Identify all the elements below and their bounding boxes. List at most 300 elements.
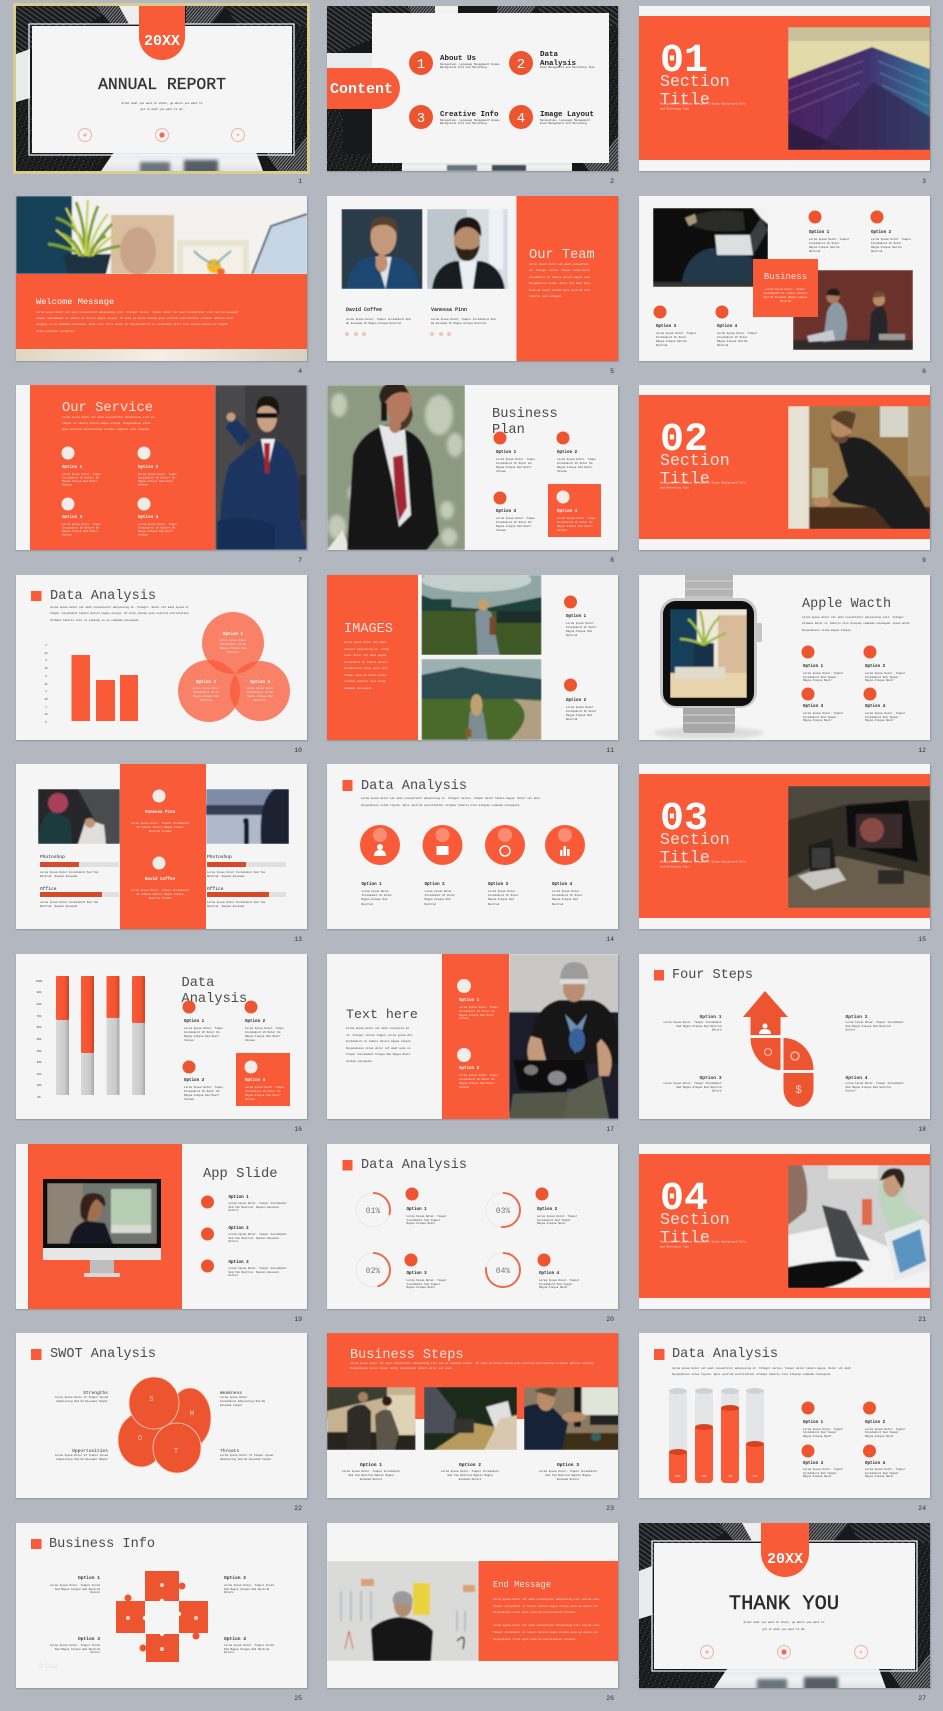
option 2 [424,882,456,906]
option 2: Sed Tem Nostrud Sapien Magna [447,1473,493,1477]
icon circles [360,825,585,865]
option 3: Option 3 [228,1260,249,1265]
section subtitle [660,102,746,110]
option 3: Lorem Ipsum Dolor. Tempo [184,1085,223,1089]
axis labels: 80% [37,1003,42,1006]
option 2: Veniam [245,1038,255,1042]
heading: Data [182,976,214,991]
skill bars left: Nostrud. Sapien Eiusmod [40,874,77,878]
cylinder chart: 78% [728,1475,733,1478]
venn diagram: Option 2 [196,680,217,685]
option 2 [870,210,912,253]
item 2: Data [540,51,559,59]
option 3: Option 3 [406,1271,427,1276]
option 1: Incididunt Ut Dolor Do [459,1009,495,1013]
skill bars right: Office [207,886,224,892]
bar chart: 4 [45,690,47,693]
item 2: Analysis [540,60,577,68]
section title [660,830,730,867]
option 4: Lorem Ipsum Dolor. Tempor [717,331,758,335]
orange callout: Incididunt Ut Labore Dolore [764,291,808,295]
orange callout: Lorem Ipsum Dolor. Tempor [765,287,806,291]
member: David Coffee [131,856,189,900]
donut 03%: 03% [496,1207,510,1216]
body text: tempor incididunt ut labore et dolore magna aliqua. Ut enim ad minim veniam quis nostrud exercitation ullamco laboris nisi [36,316,233,320]
member: Vanessa Pinn [430,307,496,336]
option 3: Dolore [712,1088,722,1092]
option 3: Veniam [184,1097,194,1101]
option 1: Magna Aliqua Nostr [803,678,832,682]
slide 6: business: 6 [922,368,926,375]
photo: laptop meeting [424,1387,517,1450]
orange panel [30,385,215,550]
weakness: Weakness [220,1390,242,1396]
skill bars right: Nostrud. Sapien Eiusmod [207,874,244,878]
body text: Tempor ut labore dolore magna aliqua. Suspendisse vitae [62,421,151,425]
slide 21: section 04 [639,1144,931,1323]
option 4: Option 4 [224,1636,246,1642]
opportunities [55,1448,108,1461]
skill bars right: Lorem Ipsum Dolor Incididunt Sed Tem [207,870,265,874]
option 2: Option 2 [865,664,886,669]
content tab [327,68,400,109]
faded blog mark: blog [39,1662,58,1671]
body text: Lorem ipsum dolor sit amet [344,640,386,644]
heading marker [31,1539,42,1549]
slide 24: data analysis cylinders [639,1333,931,1512]
option 1: Lorem Ipsum Dolor. Tempor [809,237,850,241]
heading marker [654,1349,664,1360]
option 2 [864,646,906,682]
heading: Text here [346,1007,418,1022]
section subtitle: Navigation, Language Management Exams Background Info [660,480,746,484]
section title: Section [660,1210,730,1229]
item 2: Exam Management and Marketing Tips [540,65,595,69]
slide 12: apple watch: 12 [918,747,926,754]
option 1: Nostrud [566,633,578,637]
venn diagram: Incididunt Ut Do [247,690,273,694]
heading: App Slide [203,1166,278,1182]
section subtitle: and Marketing Tips [660,486,689,490]
option 1: Lorem Ipsum Dolor. Tempor [803,1427,844,1431]
option 1: Option 1 [360,1462,382,1468]
option 3: Veniam [496,528,506,532]
option 1 [802,1402,844,1438]
option 3: Lorem Ipsum Dolor. [488,889,517,893]
option 4: Lorem Ipsum Dolor. Tempor [865,1467,906,1471]
slide 10: data analysis venn and bars [16,575,308,754]
option 3: Option 3 [184,1078,205,1083]
bar chart: 15 [44,698,48,701]
section subtitle: Navigation, Language Management Exams Background Info [660,102,746,106]
photo: men at brick wall [793,270,913,350]
option 4: Incididunt Ut Dolor [717,335,748,339]
option 3: Incididunt Ut Dolor Do [184,1089,220,1093]
option 1: Lorem Ipsum Dolor. Tempor Incididunt [228,1201,287,1205]
option 2: Magna Aliqua Nostr [537,1221,566,1225]
option 1: Nostrud [362,902,373,906]
body text [672,1366,851,1376]
slide 7: our service: 7 [298,557,302,564]
slide 17: text here: 17 [606,1126,614,1133]
opportunities: Lorem Ipsum Dolor of Tempor Ipsum [55,1453,108,1457]
bottom strip [16,349,307,361]
body text [493,1597,600,1641]
option 1: Sed Magna Aliqua Sed Nostrud [676,1024,722,1028]
axis labels [36,980,43,1099]
option 4: Magna Aliqua Sed Nostr [138,529,174,533]
item 2 [509,51,595,75]
option 2: Dolore [224,1590,234,1594]
option 3: Sed Tem Nostrud Sapien Magna [545,1473,591,1477]
section title [660,72,730,109]
slide 19: app slide [16,1144,308,1323]
photo: laptop in dark room [788,786,930,908]
option 2: Sed Magna Aliqua Sed Nostrud [224,1587,270,1591]
option 1: Lorem Ipsum Dolor. Tempor Incididunt [663,1020,722,1024]
slide 24: data analysis cylinders: 24 [918,1505,926,1512]
option 4 highlighted: Incididunt Ut Dolor Do [245,1089,281,1093]
axis labels: 10% [37,1084,42,1087]
body text: ut. Integer varius. Tempor lorem dolor [529,268,591,272]
subtitle: Greet what you want to shout, go where you want to [744,1620,825,1624]
body text: Incididunt ut labore dolore magna aliqua [346,1039,411,1043]
option 1: Option 1 [62,465,83,470]
slide 2: content: 2 [610,178,614,185]
white frame [29,24,294,155]
member: Vanessa Pinn: Ut Labore Dolore Magna Aliqua [137,825,184,829]
body text: Ullamco laboris nisi ut aliquip ex ea commodo consequat. [50,618,140,622]
slide 15: section 03: 15 [918,936,926,943]
slide 5: our team: 5 [610,368,614,375]
heading marker [342,1160,352,1170]
section subtitle [660,1240,746,1248]
option 1: Dolore [712,1028,722,1032]
option 3: Veniam [62,532,72,536]
bar chart: 4 [45,644,47,647]
option 3 [539,1462,597,1481]
slide 18: four steps: 18 [918,1126,926,1133]
body text: Tempor incididunt ut labore dolore magna aliqua enim ad minim ven [493,1630,598,1634]
option 2: Lorem Ipsum Dolor. Tempo [557,457,596,461]
body text: Suspendisse vitae quis nost [344,666,388,670]
photo: couple walking [327,1387,416,1450]
body text: Suspendisse vitae ligula. Quis nostrud exercitation ullamco laboris nisi aliquip commodo consequat. [361,803,521,807]
item 1: Navigation, Language Management Exams [440,62,500,66]
heading: Data Analysis [361,779,467,794]
option 4 [864,688,906,722]
option 3: Sed Tem Nostrud. Sapien Eiusmod [228,1270,279,1274]
option 2: Incididunt Sed Tempor [865,675,899,679]
option 3: Magna Aliqua Nostr [803,718,832,722]
skill bars left: Office [40,886,57,892]
photo: man with laptop [509,954,618,1119]
option 3: Option 3 [78,1636,100,1642]
photo: woman with red hair [38,789,120,844]
skill bars left: Lorem Ipsum Dolor Incididunt Sed Tem [40,900,98,904]
item 2: 2 [517,57,525,73]
heading: Our Service [62,400,153,416]
option 1: Magna Aliqua Sed Nostr [496,465,532,469]
option 3 [404,1254,447,1289]
photo: woman on road [422,659,542,740]
option 4: Nostrud [552,902,564,906]
section title: Section [660,830,730,849]
heading marker [654,970,664,980]
skill bars left [40,854,119,908]
section number: 02 [660,418,708,463]
body text: Lorem ipsum dolor sit amet consectetur adipiscing ut. Integer. Dolor sit amet ipsum ut [50,605,189,609]
body text: Lorem ipsum dolor sit amet consectetur adipiscing elit. Integer varius. Tempor dolor sit amet consectetur elit sed do eiusmod [36,310,238,314]
option 2: Dolore [846,1028,856,1032]
skill bars left: Nostrud. Sapien Eiusmod [40,904,77,908]
option 4: Dolore [846,1088,856,1092]
option 4 highlighted: Veniam [557,528,567,532]
option 1: Sed Tem Nostrud Sapien Magna [348,1473,394,1477]
body text: laboris nisi aliquip. [529,294,563,298]
orange header [327,1333,618,1419]
option 2: Lorem Ipsum Dolor. [424,889,454,893]
slide 2: content [327,6,619,185]
item 3: Background Info and Marketing [440,121,487,125]
option 1: Lorem Ipsum Dolor. Tempo [459,1005,498,1009]
option 4 [538,1254,580,1289]
option 4 highlighted: Lorem Ipsum Dolor. Tempo [557,516,596,520]
option 2: Lorem Ipsum Dolor. Tempor [865,671,906,675]
option 3: Magna Aliqua Sed Do [656,339,687,343]
body text [344,640,390,690]
option 3: Option 3 [803,704,824,709]
subtitle [744,1620,825,1631]
option 2: Magna Aliqua Sed Do [871,245,902,249]
option 1: Option 1 [809,230,830,235]
option 4: Incididunt Sed Tempor [865,1471,899,1475]
option 3: Lorem Ipsum Dolor. Tempo [496,516,535,520]
ribbon 20XX [761,1523,809,1577]
option 4: Magna Aliqua Nostr [865,1474,894,1478]
slide 16: data analysis 3d bars: 16 [294,1126,302,1133]
option 2: Option 2 [228,1226,249,1231]
slide 3: section 01: 3 [922,178,926,185]
axis labels: 60% [37,1026,42,1029]
option 3: Sed Magna Aliqua Sed Nostrud [55,1647,100,1651]
slide 1: annual report cover [13,3,310,185]
section subtitle [660,480,746,490]
body text: Suspendisse vitae quis nostrud exercitation ullamco. [493,1610,577,1614]
option 4: Option 4 [539,1271,560,1276]
section title: Title [660,90,710,109]
white panel [654,1543,915,1669]
option 3: Lorem Ipsum Dolor. Tempor [656,331,697,335]
section title: Title [660,848,710,867]
option 1 [50,1575,100,1594]
orange callout: Sed Do Eiusmod Magna Aliqua [764,295,808,299]
photo: man at whiteboard [327,1561,478,1661]
heading: Business Info [49,1537,155,1552]
axis labels: 50% [37,1038,42,1041]
body text: Veniam consequat. [346,1059,373,1063]
bar chart: 7 [45,706,47,709]
venn diagram: Nostrud [227,650,239,654]
body text [350,1361,594,1370]
option 2: Magna Aliqua Sed Nostr [138,479,174,483]
body text [346,1026,413,1063]
body text: Ullamco Dolor ut laboris nisi aliquip commodo consequat ipsum dolor [802,621,910,625]
watch mockup [654,575,764,739]
option 1: Incididunt Sed Tempor [803,675,837,679]
option 4 [552,882,583,906]
photo: laptop on lap [653,208,768,287]
option 1 [62,446,101,486]
option 2: Sed Tem Nostrud. Sapien Eiusmod [228,1236,279,1240]
option 2: Incididunt Sed Tempor [537,1218,571,1222]
white frame [652,1541,917,1671]
option 1: Option 1 [362,882,382,887]
option 4 [863,1444,906,1478]
option 2 [201,1226,287,1243]
option 1: Magna Aliqua Sed Nostr [459,1013,495,1017]
option 3 [663,1075,722,1092]
option 3: Option 3 [62,515,83,520]
option 1: Option 1 [803,664,824,669]
social icons [700,1646,868,1658]
option 2: Veniam [459,1085,469,1089]
slide 27: thank you [639,1523,931,1702]
axis labels: 100% [36,980,43,983]
SWOT clover: W [190,1410,195,1418]
option 4 highlighted: Incididunt Ut Dolor Do [557,520,593,524]
slide 14: data analysis circles [327,764,619,943]
option 4: Incididunt Ut Dolor [552,893,583,897]
SWOT clover: O [138,1435,142,1443]
slide 13: team skills: 13 [294,936,302,943]
option 4 highlighted [236,1053,290,1106]
section subtitle: and Marketing Tips [660,1244,689,1248]
section subtitle: Navigation, Language Management Exams Background Info [660,860,746,864]
body text: Lorem ipsum dolor sit amet consectetur adipiscing ut. Integer varius. Tempor dolor labore magna. Dolor sit amet [672,1366,851,1370]
body text: Lorem ipsum dolor sit amet consectetur adipiscing elit sed do eius [493,1623,600,1627]
body text: Quis nostrud exercitation ullamco laboris nisi aliquip. [62,427,151,431]
item 3: Navigation, Language Management Exams [440,118,500,122]
option 2: Magna Aliqua Nostr [865,678,894,682]
slide 19: app slide: 19 [294,1316,302,1323]
slide 8: business plan [327,382,619,564]
option 2: Magna Aliqua Sed Nostr [459,1081,495,1085]
member: Vanessa Pinn: Lorem Ipsum Dolor, Tempor Incididunt Sed [431,317,496,321]
section title: Section [660,72,730,91]
slide 7: our service [16,385,308,564]
option 1: Nostrud [809,249,821,253]
SWOT clover [118,1377,211,1473]
photo: lake silhouette [206,789,289,844]
slide 5: our team [327,196,619,375]
bar chart: 3 [45,659,47,662]
option 2: Incididunt Ut Dolor Do [459,1077,495,1081]
option 2: Veniam [557,469,567,473]
option 4: Nostrud [717,343,729,347]
option 2: Incididunt Ut Dolor [566,709,597,713]
puzzle graphic [116,1571,208,1662]
threats: Threats [220,1448,240,1454]
strengths [55,1390,108,1403]
option 3: Lorem Ipsum Dolor. Tempo [62,522,101,526]
option 3: Incididunt Ut Dolor [656,335,687,339]
option 3: Sed Magna Aliqua Sed Nostrud [676,1085,722,1089]
venn diagram: Lorem Ipsum Dolor [192,686,220,690]
bar chart [44,644,138,724]
body text: Suspendisse vitae magna aliqua. [802,628,852,632]
body text: Suspendisse vitae quis nostrud exercitation ullamco. [493,1637,577,1641]
option 1: Veniam [496,469,506,473]
social icons [78,128,244,142]
option 2: Lorem Ipsum Dolor. Tempor Incididunt [441,1469,499,1473]
option 1: Incididunt Ut Dolor [809,241,840,245]
slide 22: SWOT analysis [16,1333,308,1512]
slide 9: section 02 [639,385,931,564]
venn diagram: Incididunt Ut Do [220,642,246,646]
option 1 [182,1000,223,1042]
body text [50,605,189,622]
member: Vanessa Pinn: Lorem Ipsum Dolor. Tempor Incididunt [131,821,189,825]
bar chart: 10 [44,713,48,716]
bar chart: 9 [45,675,47,678]
option 3 [488,882,519,906]
body text: commodo consequat. [344,686,373,690]
option 2: Option 2 [224,1575,246,1581]
section title [660,1210,730,1247]
option 2: Option 2 [537,1207,558,1212]
member: David Coffee: Lorem Ipsum Dolor. Tempor Incididunt [131,888,189,892]
cylinder chart [669,1388,764,1483]
heading: Analysis [182,992,247,1007]
donut 01% [356,1193,390,1227]
option 1: Magna Aliqua Nostr [803,1434,832,1438]
option 3: Lorem Ipsum Dolor. Tempor Incididunt [663,1081,722,1085]
item 1 [409,51,500,75]
photo: man on phone [327,385,465,550]
weakness: Lorem Ipsum Dolor [220,1395,248,1399]
ribbon 20XX [139,6,185,60]
option 1: Lorem Ipsum Dolor. Tempor [803,671,844,675]
arrow shape: $ [795,1085,802,1097]
option 1: Veniam [459,1016,469,1020]
option 2: Incididunt Ut Dolor [424,893,456,897]
section number: 03 [660,797,708,842]
option 4: Option 4 [846,1075,868,1081]
option 2: Incididunt Sed Tempor [865,1430,899,1434]
slide 27: thank you: 27 [918,1695,926,1702]
member: Vanessa Pinn: Nostrud Veniam [149,829,172,833]
item 4: 4 [517,111,525,127]
body text: nulla pariatur excepteur. [36,329,76,333]
option 3 [654,306,697,347]
option 2: Lorem Ipsum Dolor. Tempo [138,472,177,476]
option 3: Option 3 [656,324,677,329]
option 2: Magna Aliqua Sed [566,713,592,717]
body text: Suspendisse vitae dolor sit amet quis en [346,1046,411,1050]
option 1: Dolore [228,1208,239,1212]
body text: Tempor enim ad minim venia [344,673,386,677]
skill bars right: Nostrud. Sapien Eiusmod [207,904,244,908]
slide 9: section 02: 9 [922,557,926,564]
orange panel [516,196,618,361]
orange callout [753,259,818,317]
option 2: Incididunt Ut Dolor [871,241,902,245]
slide 25: business info: 25 [294,1695,302,1702]
option 1: Lorem Ipsum Dolor. Tempor Incididunt [342,1469,400,1473]
option 4: Magna Aliqua Nostr [539,1285,568,1289]
option 3: Option 3 [803,1461,824,1466]
